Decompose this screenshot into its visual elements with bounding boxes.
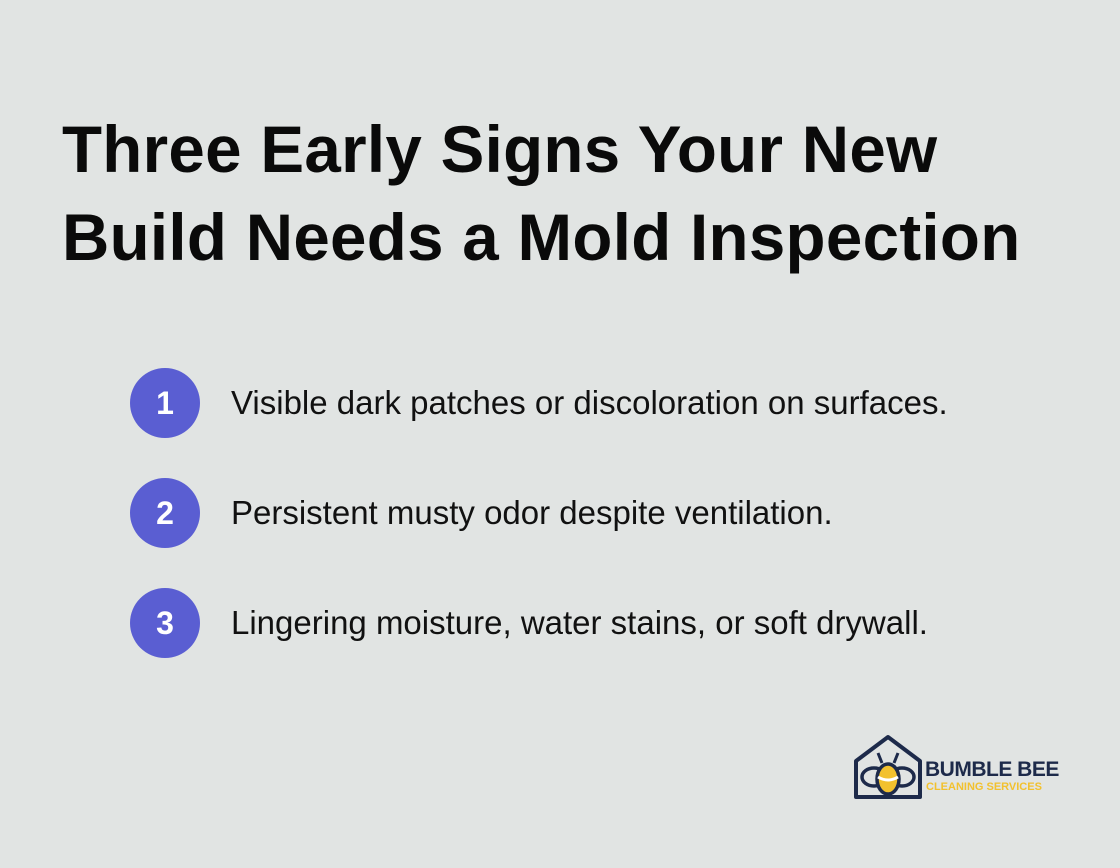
item 1: 1 bbox=[156, 385, 174, 421]
logo: CLEANING SERVICES bbox=[926, 781, 1042, 793]
icon: bee house bbox=[854, 735, 922, 799]
item 2: 2 bbox=[156, 495, 174, 531]
logo text: BUMBLE BEE bbox=[925, 758, 1059, 781]
title: Three Early Signs Your New bbox=[62, 113, 937, 186]
item 3 bbox=[130, 588, 928, 658]
item 1: Visible dark patches or discoloration on surfaces. bbox=[231, 384, 948, 421]
logo bbox=[854, 735, 1059, 799]
item 2: Persistent musty odor despite ventilation. bbox=[231, 494, 833, 531]
item 3: 3 bbox=[156, 605, 174, 641]
item 3: Lingering moisture, water stains, or soft drywall. bbox=[231, 604, 928, 641]
title: Build Needs a Mold Inspection bbox=[62, 201, 1021, 274]
item 2 bbox=[130, 478, 833, 548]
item 1 bbox=[130, 368, 948, 438]
title bbox=[62, 113, 1021, 274]
